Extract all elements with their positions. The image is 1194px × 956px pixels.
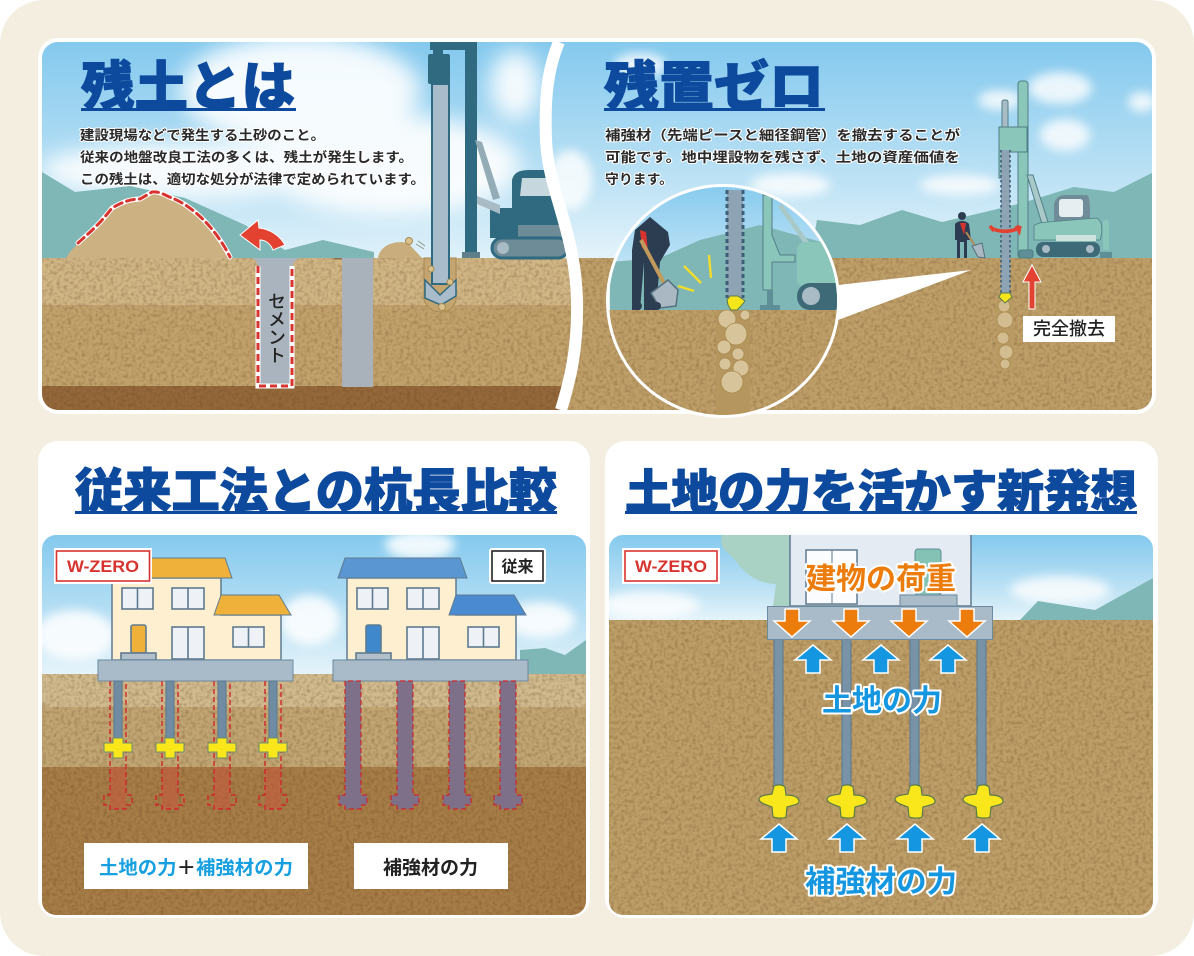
badge: W-ZERO xyxy=(622,548,720,584)
mountains xyxy=(520,640,586,674)
label: complete removal xyxy=(1023,316,1115,342)
label: complete removal: 完全撤去 xyxy=(1033,319,1105,339)
lens rig xyxy=(760,194,837,310)
rotation arrow xyxy=(990,226,1020,231)
conventional piles xyxy=(339,681,522,809)
building xyxy=(790,530,971,606)
mountains xyxy=(42,172,374,258)
panel: residual soil scene xyxy=(40,35,1160,410)
label: land + reinforcement: 土地の力＋補強材の力 xyxy=(99,857,293,879)
badge: W-ZERO: W-ZERO xyxy=(635,557,707,576)
pile tips xyxy=(759,785,1003,818)
heading: 従来工法との杭長比較 xyxy=(75,466,557,519)
lens sparks xyxy=(678,255,711,291)
lens sky xyxy=(609,187,834,310)
bored hole xyxy=(424,258,456,312)
roofs xyxy=(338,558,467,578)
zoom lens xyxy=(606,184,839,418)
mountains xyxy=(1020,578,1153,620)
conventional house xyxy=(333,558,528,681)
walls xyxy=(112,578,281,660)
ground xyxy=(609,620,1153,915)
scene xyxy=(35,530,586,915)
lens soil column xyxy=(716,310,750,420)
lens worker xyxy=(632,217,678,310)
heading: residual soil: 残土とは xyxy=(81,58,295,117)
red curved arrow xyxy=(240,220,285,250)
tree xyxy=(721,535,790,606)
red up arrow xyxy=(1023,265,1041,309)
roofs xyxy=(105,558,232,578)
soil mound dashed outline xyxy=(78,192,230,257)
text block: zero residual description xyxy=(605,127,961,187)
small rig mast xyxy=(999,81,1048,258)
scene xyxy=(600,530,1153,915)
windows and door xyxy=(356,588,499,660)
ground xyxy=(530,258,1160,410)
slab xyxy=(98,660,293,681)
right scene xyxy=(530,42,1160,410)
panel: land power concept xyxy=(600,441,1158,918)
slab xyxy=(333,660,528,681)
panel: top scenes frame xyxy=(38,38,1156,414)
text block: residual soil description: 従来の地盤改良工法の多くは、残土が発生します。 xyxy=(80,149,413,165)
small excavator xyxy=(1034,195,1112,258)
rig: mast xyxy=(428,42,500,258)
text block: residual soil description: この残土は、適切な処分が法律で定められています。 xyxy=(80,171,425,187)
piles xyxy=(774,639,986,789)
auger pipe xyxy=(425,84,456,310)
text block: zero residual description: 守ります。 xyxy=(605,171,673,187)
label: land + reinforcement xyxy=(84,843,308,889)
text block: residual soil description xyxy=(80,127,425,187)
walls xyxy=(347,578,516,660)
cement column 2 xyxy=(334,258,373,387)
badge: conventional xyxy=(489,548,546,584)
blue reinforcement arrows xyxy=(761,824,1000,852)
orange load arrows xyxy=(774,609,985,637)
clouds xyxy=(600,576,1110,619)
heading: zero residual: 残置ゼロ xyxy=(604,57,824,117)
soil column under small rig xyxy=(996,298,1014,370)
text block: residual soil description: 建設現場などで発生する土砂のこと。 xyxy=(80,127,325,143)
soil mound xyxy=(66,193,232,258)
badge: W-ZERO: W-ZERO xyxy=(67,557,139,576)
W-ZERO piles xyxy=(104,681,287,809)
zoom lens pointer xyxy=(838,270,971,320)
sky xyxy=(42,535,586,675)
lens ground xyxy=(609,310,837,415)
clouds xyxy=(548,53,1156,210)
clouds xyxy=(35,530,575,660)
soil layers xyxy=(42,258,572,410)
mountains xyxy=(810,173,1152,258)
cement column with dashed outline xyxy=(251,258,300,388)
text block: zero residual description: 補強材（先端ピースと細径鋼管）を撤去することが xyxy=(605,127,961,143)
blue land arrows xyxy=(795,645,966,673)
text block: zero residual description: 可能です。地中埋設物を残さず、土地の資産価値を xyxy=(605,149,960,165)
worker with shovel xyxy=(955,212,985,258)
badge: W-ZERO xyxy=(54,548,152,584)
lens mountains xyxy=(610,225,850,310)
panel: pile length comparison xyxy=(35,441,590,918)
clouds xyxy=(40,35,540,215)
label: cement: セメント xyxy=(266,292,286,364)
heading: 土地の力を活かす新発想 xyxy=(625,466,1137,518)
label: reinforcement only: 補強材の力 xyxy=(383,857,478,879)
sky xyxy=(530,42,1160,262)
sky xyxy=(42,42,572,272)
label: building load: 建物の荷重 xyxy=(806,563,956,596)
label: reinforcement only xyxy=(354,843,508,889)
badge: conventional: 従来 xyxy=(501,558,534,576)
spoil near auger xyxy=(378,238,425,258)
screw pile xyxy=(999,150,1012,303)
excavator xyxy=(477,170,570,258)
label: reinforcement power: 補強材の力 xyxy=(805,866,957,899)
curved white divider xyxy=(546,42,577,410)
lens screw pile xyxy=(727,190,745,310)
sky xyxy=(609,535,1153,621)
W-ZERO house xyxy=(98,558,293,681)
label: land power: 土地の力 xyxy=(822,685,942,718)
slab xyxy=(768,606,992,640)
soil layers xyxy=(42,674,586,915)
windows and door xyxy=(121,588,264,660)
